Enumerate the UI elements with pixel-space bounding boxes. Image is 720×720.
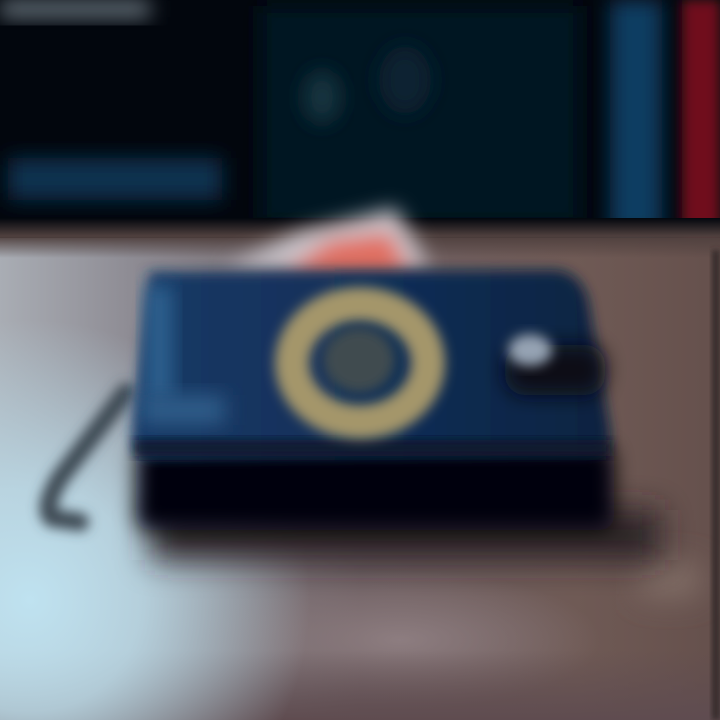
wallet body (131, 270, 614, 530)
background: dark shelf wall (0, 0, 720, 245)
table surface (0, 218, 720, 720)
wallet clasp (505, 334, 605, 395)
banknotes sticking out (225, 208, 430, 272)
gold ring emblem (292, 304, 428, 422)
wallet shadow (150, 510, 660, 560)
wrist strap (48, 392, 126, 522)
